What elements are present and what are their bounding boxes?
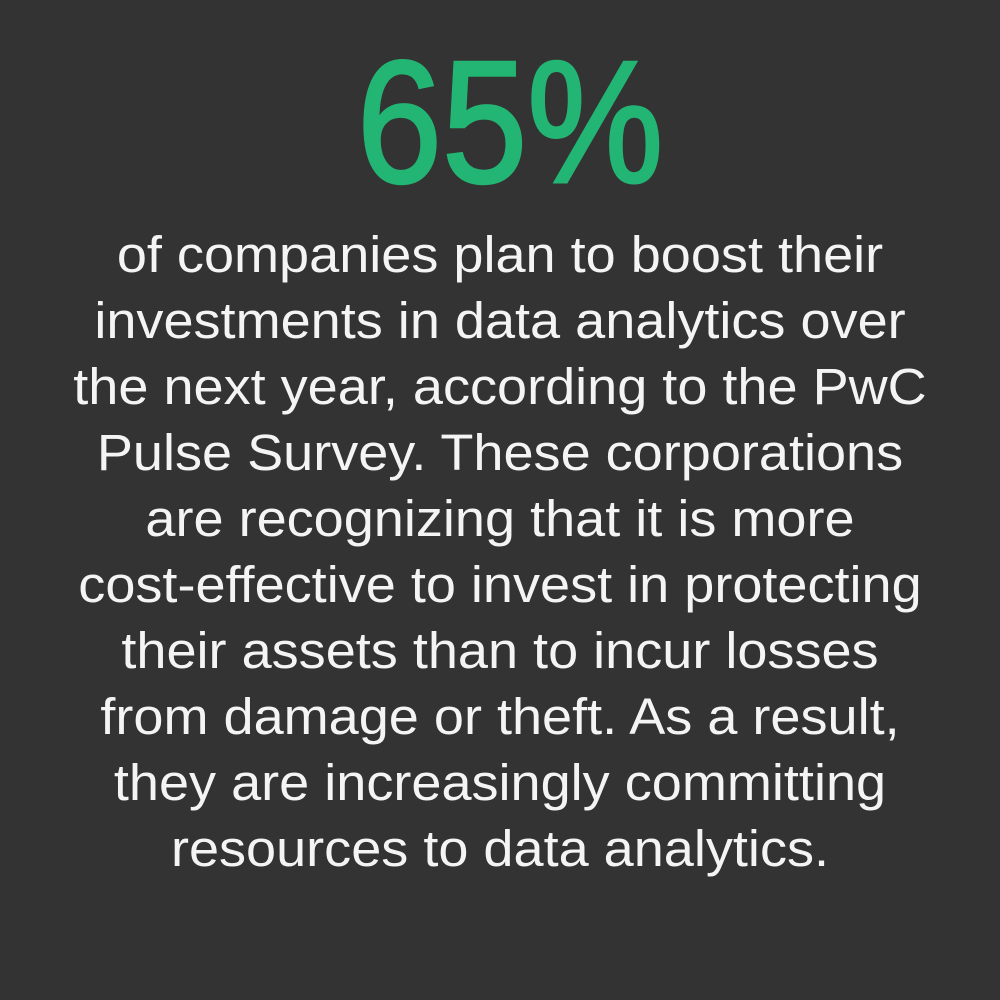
- text block: description: are recognizing that it is more: [145, 490, 855, 547]
- text block: description: [73, 226, 927, 877]
- text block: description: they are increasingly committing: [114, 754, 886, 811]
- text block: description: from damage or theft. As a result,: [100, 688, 900, 745]
- text block: description: of companies plan to boost their: [117, 226, 883, 283]
- text block: description: resources to data analytics.: [171, 820, 829, 877]
- text block: description: investments in data analytics over: [94, 292, 906, 349]
- text block: description: cost-effective to invest in protecting: [78, 556, 922, 613]
- text block: description: Pulse Survey. These corporations: [97, 424, 903, 481]
- text block: description: the next year, according to the PwC: [73, 358, 927, 415]
- title: 65%: 65%: [357, 24, 663, 219]
- text block: description: their assets than to incur losses: [121, 622, 879, 679]
